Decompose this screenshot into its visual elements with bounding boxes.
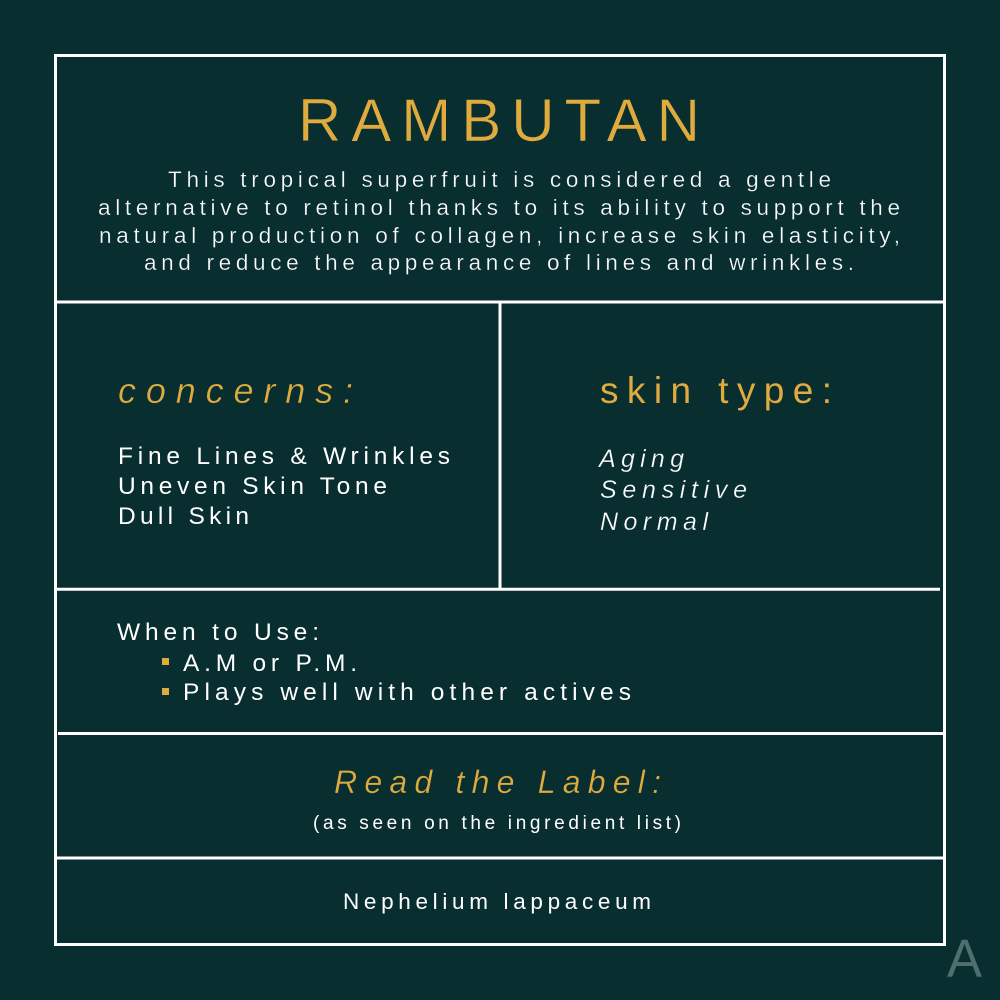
concerns list: Dull Skin (118, 503, 249, 530)
watermark logo: A (947, 929, 982, 989)
intro text: natural production of collagen, increase skin elasticity, (99, 223, 900, 248)
skin type list: Normal (600, 508, 709, 536)
concerns list (118, 443, 450, 530)
bullet: plays well: Plays well with other actives (183, 679, 631, 706)
concerns list: Fine Lines & Wrinkles (118, 443, 450, 470)
intro text: alternative to retinol thanks to its ability to support the (98, 195, 900, 220)
when to use heading: When to Use: (117, 619, 319, 646)
ingredient name: Nephelium lappaceum (343, 889, 651, 914)
skin type list: Aging (597, 445, 684, 473)
panel: read the label (313, 764, 681, 834)
panel: when to use (117, 619, 631, 706)
concerns heading: concerns: (118, 370, 353, 411)
frame and dividers (56, 56, 944, 944)
panel: skin type (597, 370, 832, 536)
intro text (98, 167, 900, 275)
read the label heading: Read the Label: (334, 764, 661, 800)
intro text: This tropical superfruit is considered a gentle (168, 167, 831, 192)
skin type list: Sensitive (600, 476, 747, 504)
title: RAMBUTAN (298, 87, 700, 154)
skin type list (597, 445, 747, 536)
skin type heading: skin type: (600, 370, 832, 411)
intro text: and reduce the appearance of lines and wrinkles. (144, 250, 854, 275)
panel: concerns (118, 370, 450, 530)
bullet: A.M or P.M.: A.M or P.M. (183, 650, 357, 677)
concerns list: Uneven Skin Tone (118, 473, 387, 500)
read the label note: (as seen on the ingredient list) (313, 813, 681, 834)
